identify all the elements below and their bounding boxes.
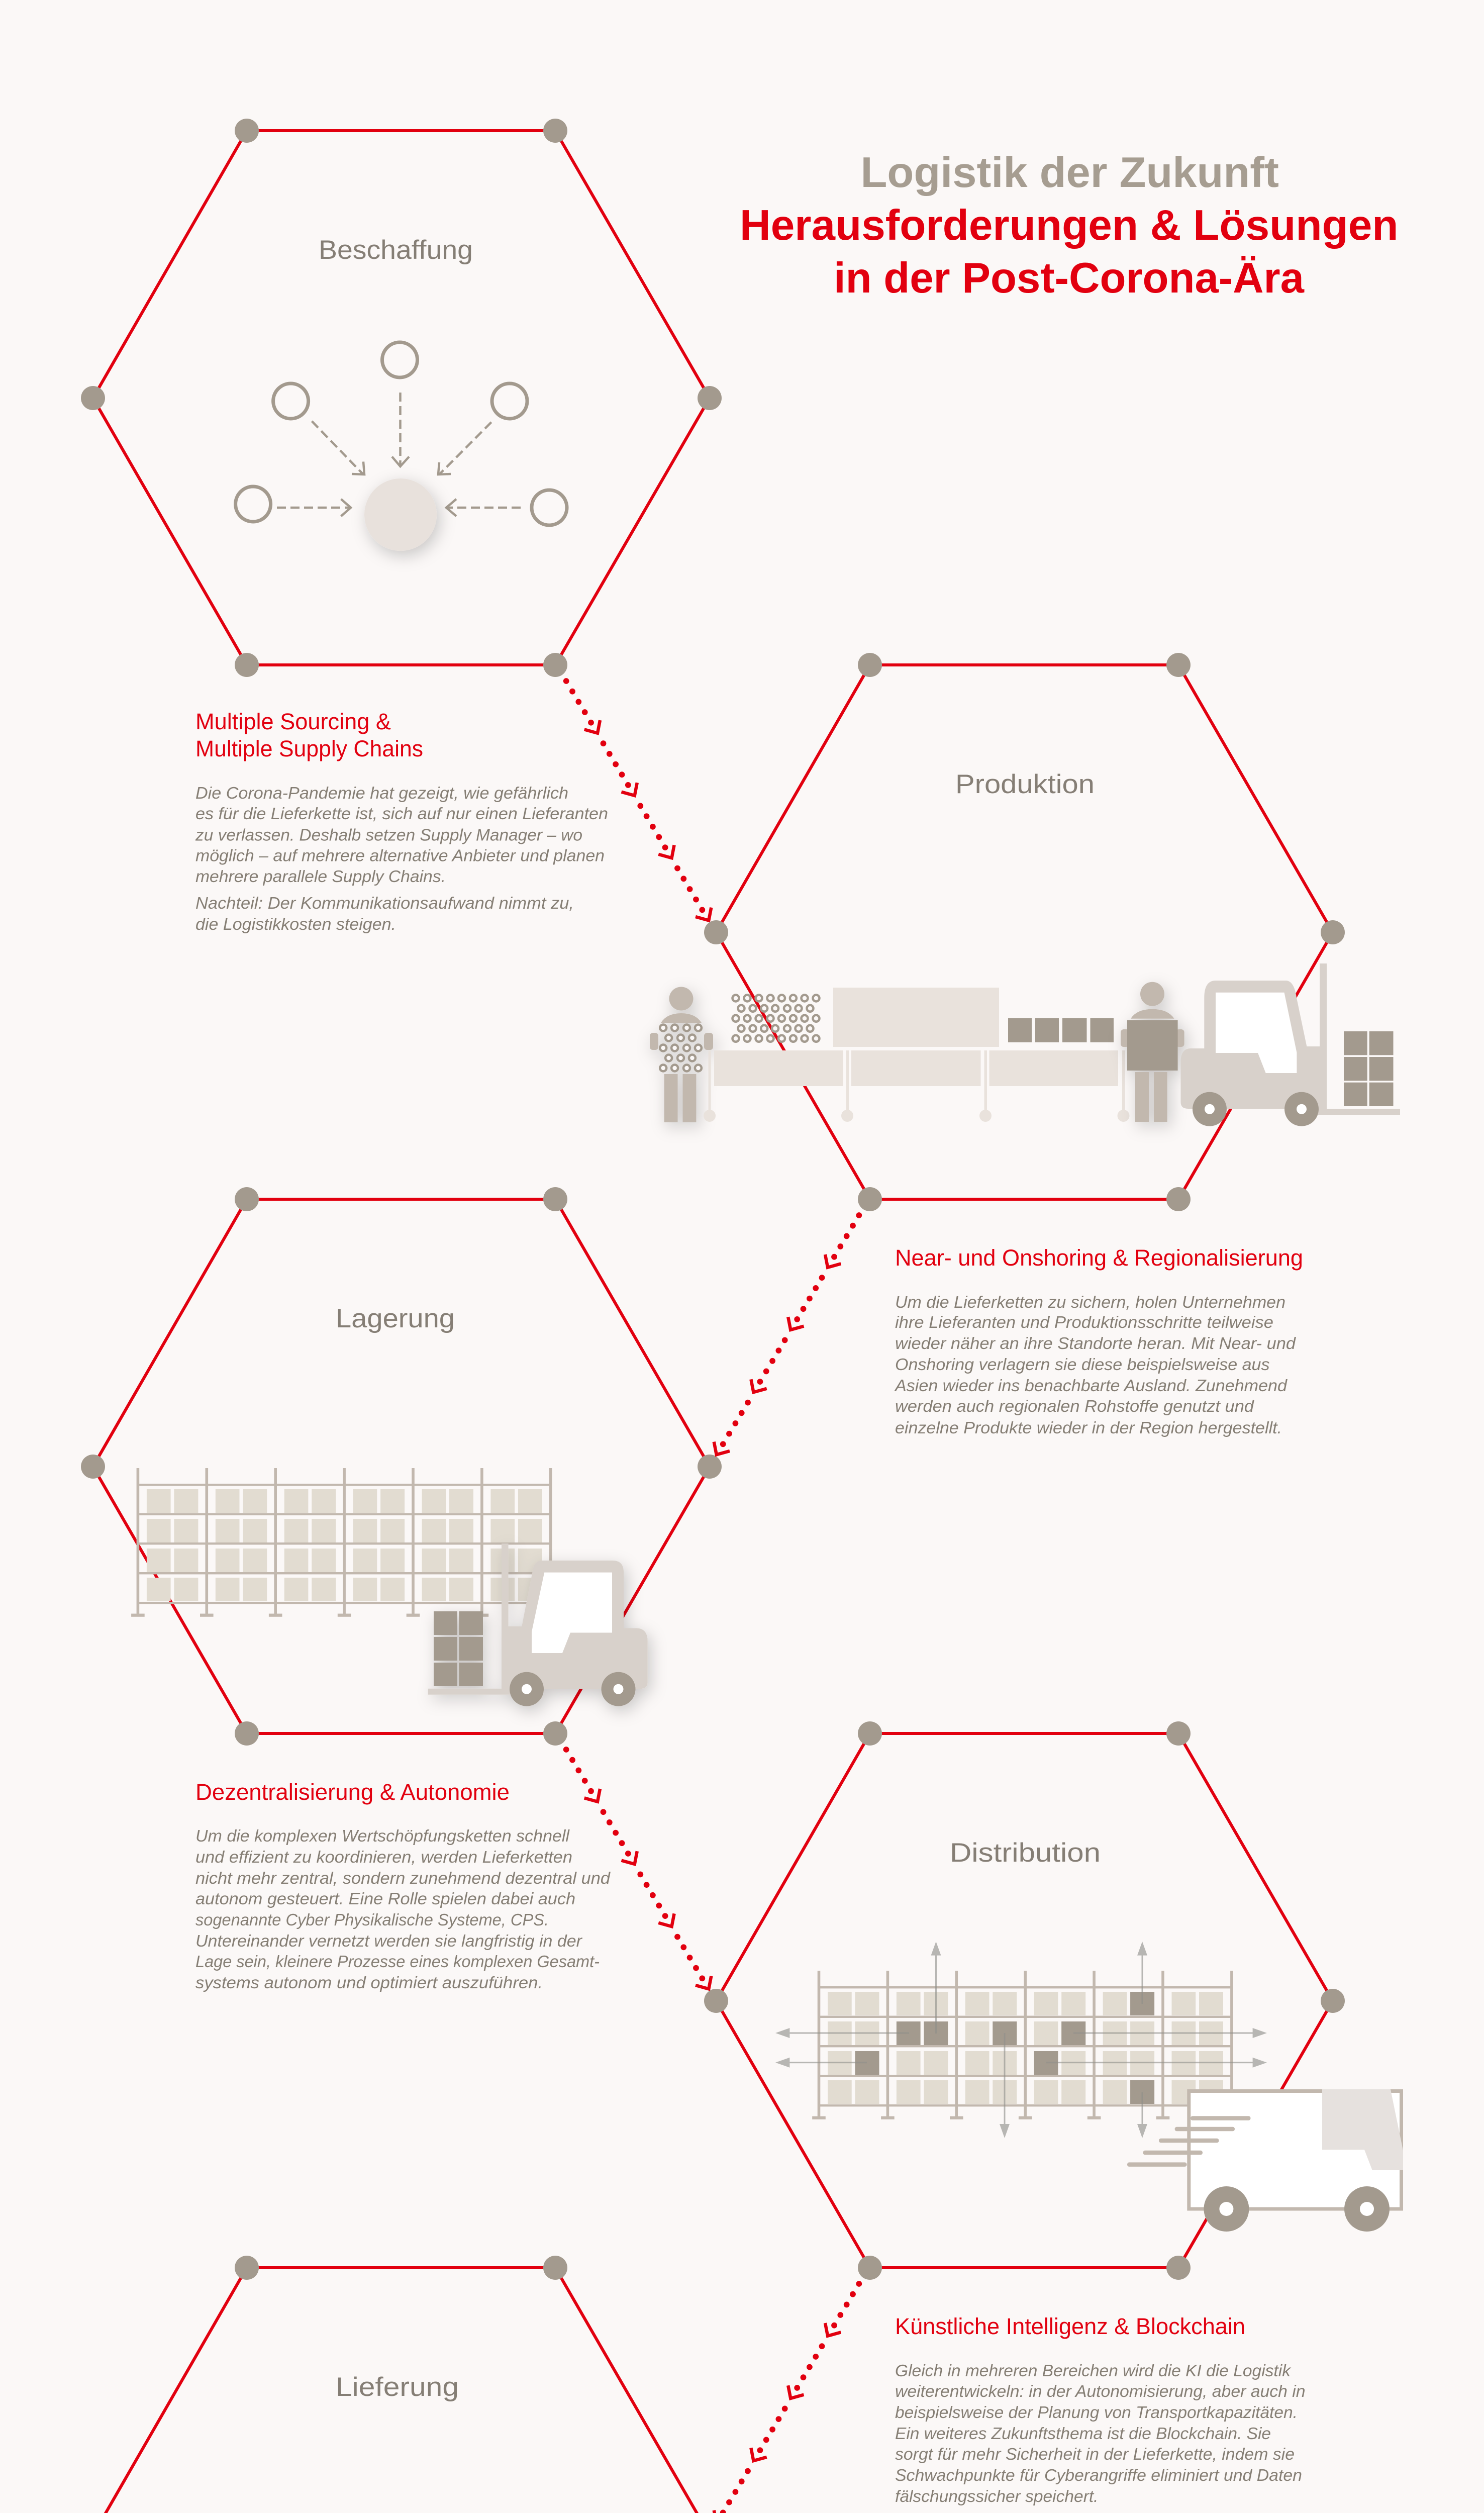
conveyor: [704, 988, 1130, 1122]
body: Near- und Onshoring: ihre Lieferanten und Produktionsschritte teilweise: [895, 1313, 1273, 1331]
arrow: Lagerung to Distribution: [563, 1747, 711, 1989]
body: Dezentralisierung: autonom gesteuert. Eine Rolle spielen dabei auch: [195, 1889, 575, 1908]
body: Dezentralisierung: systems autonom und optimiert auszuführen.: [195, 1973, 543, 1992]
body: Multiple Sourcing: es für die Lieferkette ist, sich auf nur einen Lieferanten: [195, 804, 608, 823]
warehouse illustration: [131, 1468, 648, 1706]
body: Dezentralisierung: Untereinander vernetzt werden sie langfristig in der: [195, 1931, 583, 1950]
production line illustration: [650, 963, 1400, 1126]
body: Künstliche Intelligenz: Gleich in mehreren Bereichen wird die KI die Logistik: [895, 2361, 1292, 2380]
body: Near- und Onshoring: Asien wieder ins benachbarte Ausland. Zunehmend: [894, 1376, 1288, 1395]
body: Multiple Sourcing: mehrere parallele Supply Chains.: [195, 867, 446, 886]
body: Near- und Onshoring: werden auch regionalen Rohstoffe genutzt und: [895, 1397, 1255, 1415]
delivery van: [1127, 2089, 1403, 2232]
arrow: Distribution to Lieferung: [714, 2281, 862, 2513]
body: Dezentralisierung: Lage sein, kleinere Prozesse eines komplexen Gesamt-: [195, 1952, 600, 1971]
title: in der Post-Corona-Ära: [834, 254, 1305, 302]
text block: Dezentralisierung: [195, 1779, 611, 1992]
body: Multiple Sourcing: möglich – auf mehrere alternative Anbieter und planen: [195, 846, 605, 865]
label: Lieferung: Lieferung: [336, 2372, 459, 2402]
body: Near- und Onshoring: [894, 1293, 1297, 1437]
finished boxes: [1008, 1018, 1114, 1042]
title: [740, 149, 1398, 302]
shelving: [812, 1971, 1238, 2119]
body: Künstliche Intelligenz: beispielsweise der Planung von Transportkapazitäten.: [895, 2403, 1298, 2422]
shelving: [131, 1468, 557, 1617]
body: Multiple Sourcing: [195, 784, 608, 933]
movement arrows: [775, 1942, 1267, 2138]
worker left: [650, 987, 713, 1122]
title: Herausforderungen & Lösungen: [740, 202, 1398, 249]
heading: Dezentralisierung: Dezentralisierung & Autonomie: [195, 1779, 510, 1805]
body: Multiple Sourcing: die Logistikkosten steigen.: [195, 915, 396, 933]
heading: Multiple Sourcing: Multiple Supply Chains: [195, 736, 423, 761]
body: Dezentralisierung: und effizient zu koordinieren, werden Lieferketten: [195, 1848, 572, 1866]
body: Dezentralisierung: [195, 1826, 611, 1992]
title: Logistik der Zukunft: [860, 149, 1279, 197]
label: Distribution: Distribution: [950, 1838, 1101, 1868]
body: Künstliche Intelligenz: fälschungssicher speichert.: [895, 2487, 1099, 2505]
hexagon: Lagerung: [81, 1187, 722, 1746]
worker right: [1121, 982, 1184, 1122]
heading: Multiple Sourcing: [195, 709, 423, 761]
body: Multiple Sourcing: Die Corona-Pandemie hat gezeigt, wie gefährlich: [195, 784, 568, 802]
heading: Near- und Onshoring: Near- und Onshoring & Regionalisierung: [895, 1245, 1303, 1271]
body: Dezentralisierung: nicht mehr zentral, sondern zunehmend dezentral und: [195, 1869, 611, 1887]
forklift with pallet: [428, 1543, 648, 1706]
arrow: Beschaffung to Produktion: [563, 678, 711, 920]
arrow: Produktion to Lagerung: [714, 1212, 862, 1455]
body: Near- und Onshoring: Onshoring verlagern sie diese beispielsweise aus: [895, 1355, 1269, 1374]
body: Künstliche Intelligenz: sorgt für mehr Sicherheit in der Lieferkette, indem sie: [895, 2445, 1295, 2463]
body: Multiple Sourcing: Nachteil: Der Kommunikationsaufwand nimmt zu,: [195, 894, 574, 912]
body: Künstliche Intelligenz: Ein weiteres Zukunftsthema ist die Blockchain. Sie: [895, 2424, 1271, 2443]
body: Dezentralisierung: Um die komplexen Wertschöpfungsketten schnell: [195, 1826, 570, 1845]
hexagon: Distribution: [704, 1721, 1345, 2280]
body: Multiple Sourcing: zu verlassen. Deshalb setzen Supply Manager – wo: [195, 825, 582, 844]
heading: Multiple Sourcing: Multiple Sourcing &: [195, 709, 391, 734]
label: Produktion: Produktion: [955, 769, 1095, 799]
distribution illustration: [775, 1942, 1403, 2232]
picked boxes: [855, 1992, 1154, 2104]
hexagon: Beschaffung: [81, 119, 722, 677]
text block: Künstliche Intelligenz: [895, 2313, 1306, 2505]
hexagon: Lieferung: [81, 2256, 722, 2513]
icon: multiple sourcing diagram: [236, 342, 567, 551]
body: Near- und Onshoring: Um die Lieferketten zu sichern, holen Unternehmen: [895, 1293, 1285, 1311]
body: Near- und Onshoring: wieder näher an ihre Standorte heran. Mit Near- und: [895, 1334, 1297, 1352]
body: Dezentralisierung: sogenannte Cyber Physikalische Systeme, CPS.: [195, 1910, 549, 1929]
hexagon: Produktion: [704, 653, 1345, 1211]
body: Künstliche Intelligenz: Schwachpunkte für Cyberangriffe eliminiert und Daten: [895, 2466, 1302, 2484]
text block: Near- und Onshoring: [894, 1245, 1303, 1437]
forklift: [1181, 963, 1400, 1126]
body: Künstliche Intelligenz: weiterentwickeln: in der Autonomisierung, aber auch in: [895, 2382, 1306, 2400]
label: Lagerung: Lagerung: [336, 1304, 455, 1333]
body: Künstliche Intelligenz: [895, 2361, 1306, 2505]
text block: Multiple Sourcing: [195, 709, 608, 933]
label: Beschaffung: Beschaffung: [319, 235, 473, 265]
material rings: [733, 995, 819, 1042]
heading: Künstliche Intelligenz: Künstliche Intelligenz & Blockchain: [895, 2313, 1245, 2339]
body: Near- und Onshoring: einzelne Produkte wieder in der Region hergestellt.: [895, 1418, 1282, 1437]
